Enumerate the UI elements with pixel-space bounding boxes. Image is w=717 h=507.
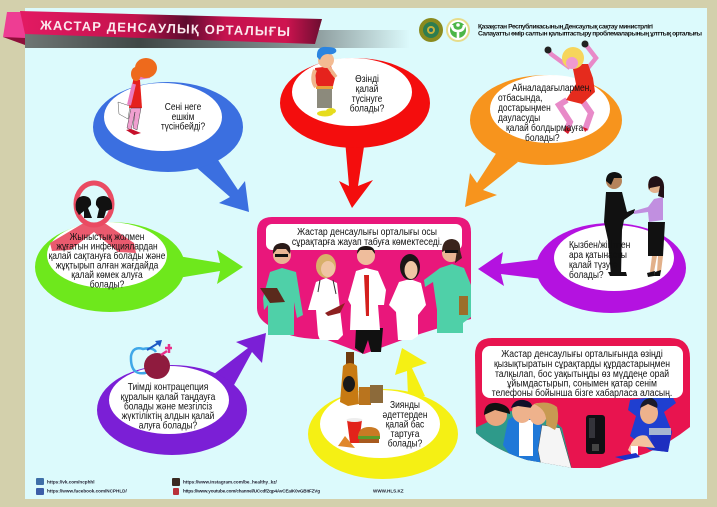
panel text: сұрақтарға жауап табуға көмектеседі. [292,237,442,247]
panel text: телефоны бойынша бізге хабарласа аласың. [492,388,672,398]
figure: worried man sitting [615,396,676,460]
question text: жұқтырып алған жағдайда [56,260,159,271]
icon: national centre logo [446,18,470,42]
bubble: yellow [308,348,458,479]
question text: болады? [350,103,384,114]
question text: қалай сақтануға болады және [49,250,165,261]
figure: man and woman shaking hands [604,172,665,277]
question text [161,101,205,132]
question text: Айналадағылармен, [512,82,592,93]
panel text box [482,346,683,398]
question text: түсінбейді? [161,121,205,132]
ministry header [419,18,702,42]
question text [350,73,384,114]
icon: awareness ribbon with silhouettes [50,183,136,253]
question text: түсінуге [352,93,382,104]
question text: қалай түзуге [569,259,618,270]
doctor: centre male [348,246,386,354]
question text: Зиянды [390,399,420,410]
question text: Сені неге [165,101,201,112]
icon: mobile phone [586,415,605,454]
question text: құралын қалай таңдауға [121,391,216,402]
bubble: red [280,47,430,208]
icon: bottle, glasses and fast food [338,352,383,448]
question text: Жыныстық жолмен [70,231,144,242]
figure: group of friends [475,400,572,470]
panel: trust phone [475,338,690,470]
panel text [292,227,442,247]
panel text: Жастар денсаулығы орталығында өзіңді [501,349,663,359]
question text [382,399,428,449]
instagram link: https://www.instagram.com/be_healthy_kz/ [183,480,277,484]
bubble: purple right [478,172,686,313]
question text: дауласуды [498,112,540,123]
vk link: https://vk.com/ncphhl [47,480,94,484]
doctor: right teal [424,239,471,333]
website: WWW.HLS.KZ [373,488,404,494]
question text: Қызбен/жігітпен [569,239,630,250]
question text: отбасында, [498,92,542,103]
figure: upset woman [118,58,157,135]
ministry name: Қазақстан Республикасының Денсаулық сақтау министрлігі [478,22,653,30]
question text: достарыңмен [498,102,551,113]
icon: facebook [36,488,44,495]
panel text: талқылап, бос уақытыңды өз мүддеңе орай [495,369,669,379]
figure: shouting woman [544,40,596,134]
question text: қалай болдырмауға [506,122,584,133]
bubble: green [35,183,243,312]
question text: қалай [356,83,378,94]
question text: болады? [569,269,604,280]
question text: болады? [388,438,422,449]
footer links [36,478,404,495]
question text: болады және мезгілсіз [124,401,212,412]
question text: ешкім [172,111,194,122]
title: ЖАСТАР ДЕНСАУЛЫҚ ОРТАЛЫҒЫ [39,17,290,39]
doctor: left teal [260,243,303,335]
icon: instagram [172,478,180,486]
panel text: қызықтыратын сұрақтарды құрдастарыңмен [494,359,670,369]
bubble: blue [93,58,249,212]
question text: болады? [90,279,124,290]
question text: қалай бас [386,419,425,430]
doctors group [260,239,471,354]
icon: gender symbols heart [131,340,172,379]
doctor: left female [308,254,345,340]
icon: vk [36,478,44,485]
bubble: orange [465,40,622,207]
bubble: violet [97,333,266,455]
question text [121,381,216,431]
question text [498,82,592,143]
ministry header: Салауатты өмір салтын қалыптастыру проблемаларының ұлттық орталығы [478,30,702,38]
panel text box [266,224,462,250]
question text: жұғатын инфекциялардан [56,241,158,252]
youtube link: https://www.youtube.com/channel/UCcdfZqp4AvCEaiK0vGBitFZVg [183,488,320,494]
question text: әдеттерден [382,409,428,420]
icon: state emblem [419,18,443,42]
question text: жүктіліктің алдын қалай [122,410,214,421]
question text [49,231,165,290]
question text [569,239,630,280]
doctor: right female [389,254,426,340]
question text: қалай көмек алуға [71,269,144,280]
figure: thinking boy [313,47,336,116]
icon: youtube [173,488,179,495]
panel: doctors [257,217,471,354]
title banner [3,11,410,48]
question text: алуға болады? [139,420,197,431]
question text: болады? [525,132,560,143]
panel text: Жастар денсаулығы орталығы осы [297,227,437,237]
question text: Өзінді [355,73,379,84]
question text: тартуға [391,428,420,439]
panel text: ұйымдастырып, сонымен қатар сенім [507,378,657,389]
question text: Тиімді контрацепция [128,381,208,392]
facebook link: https://www.facebook.com/NCPHLD/ [47,488,127,494]
panel text [492,349,672,398]
question text: ара қатынасты [569,249,627,260]
